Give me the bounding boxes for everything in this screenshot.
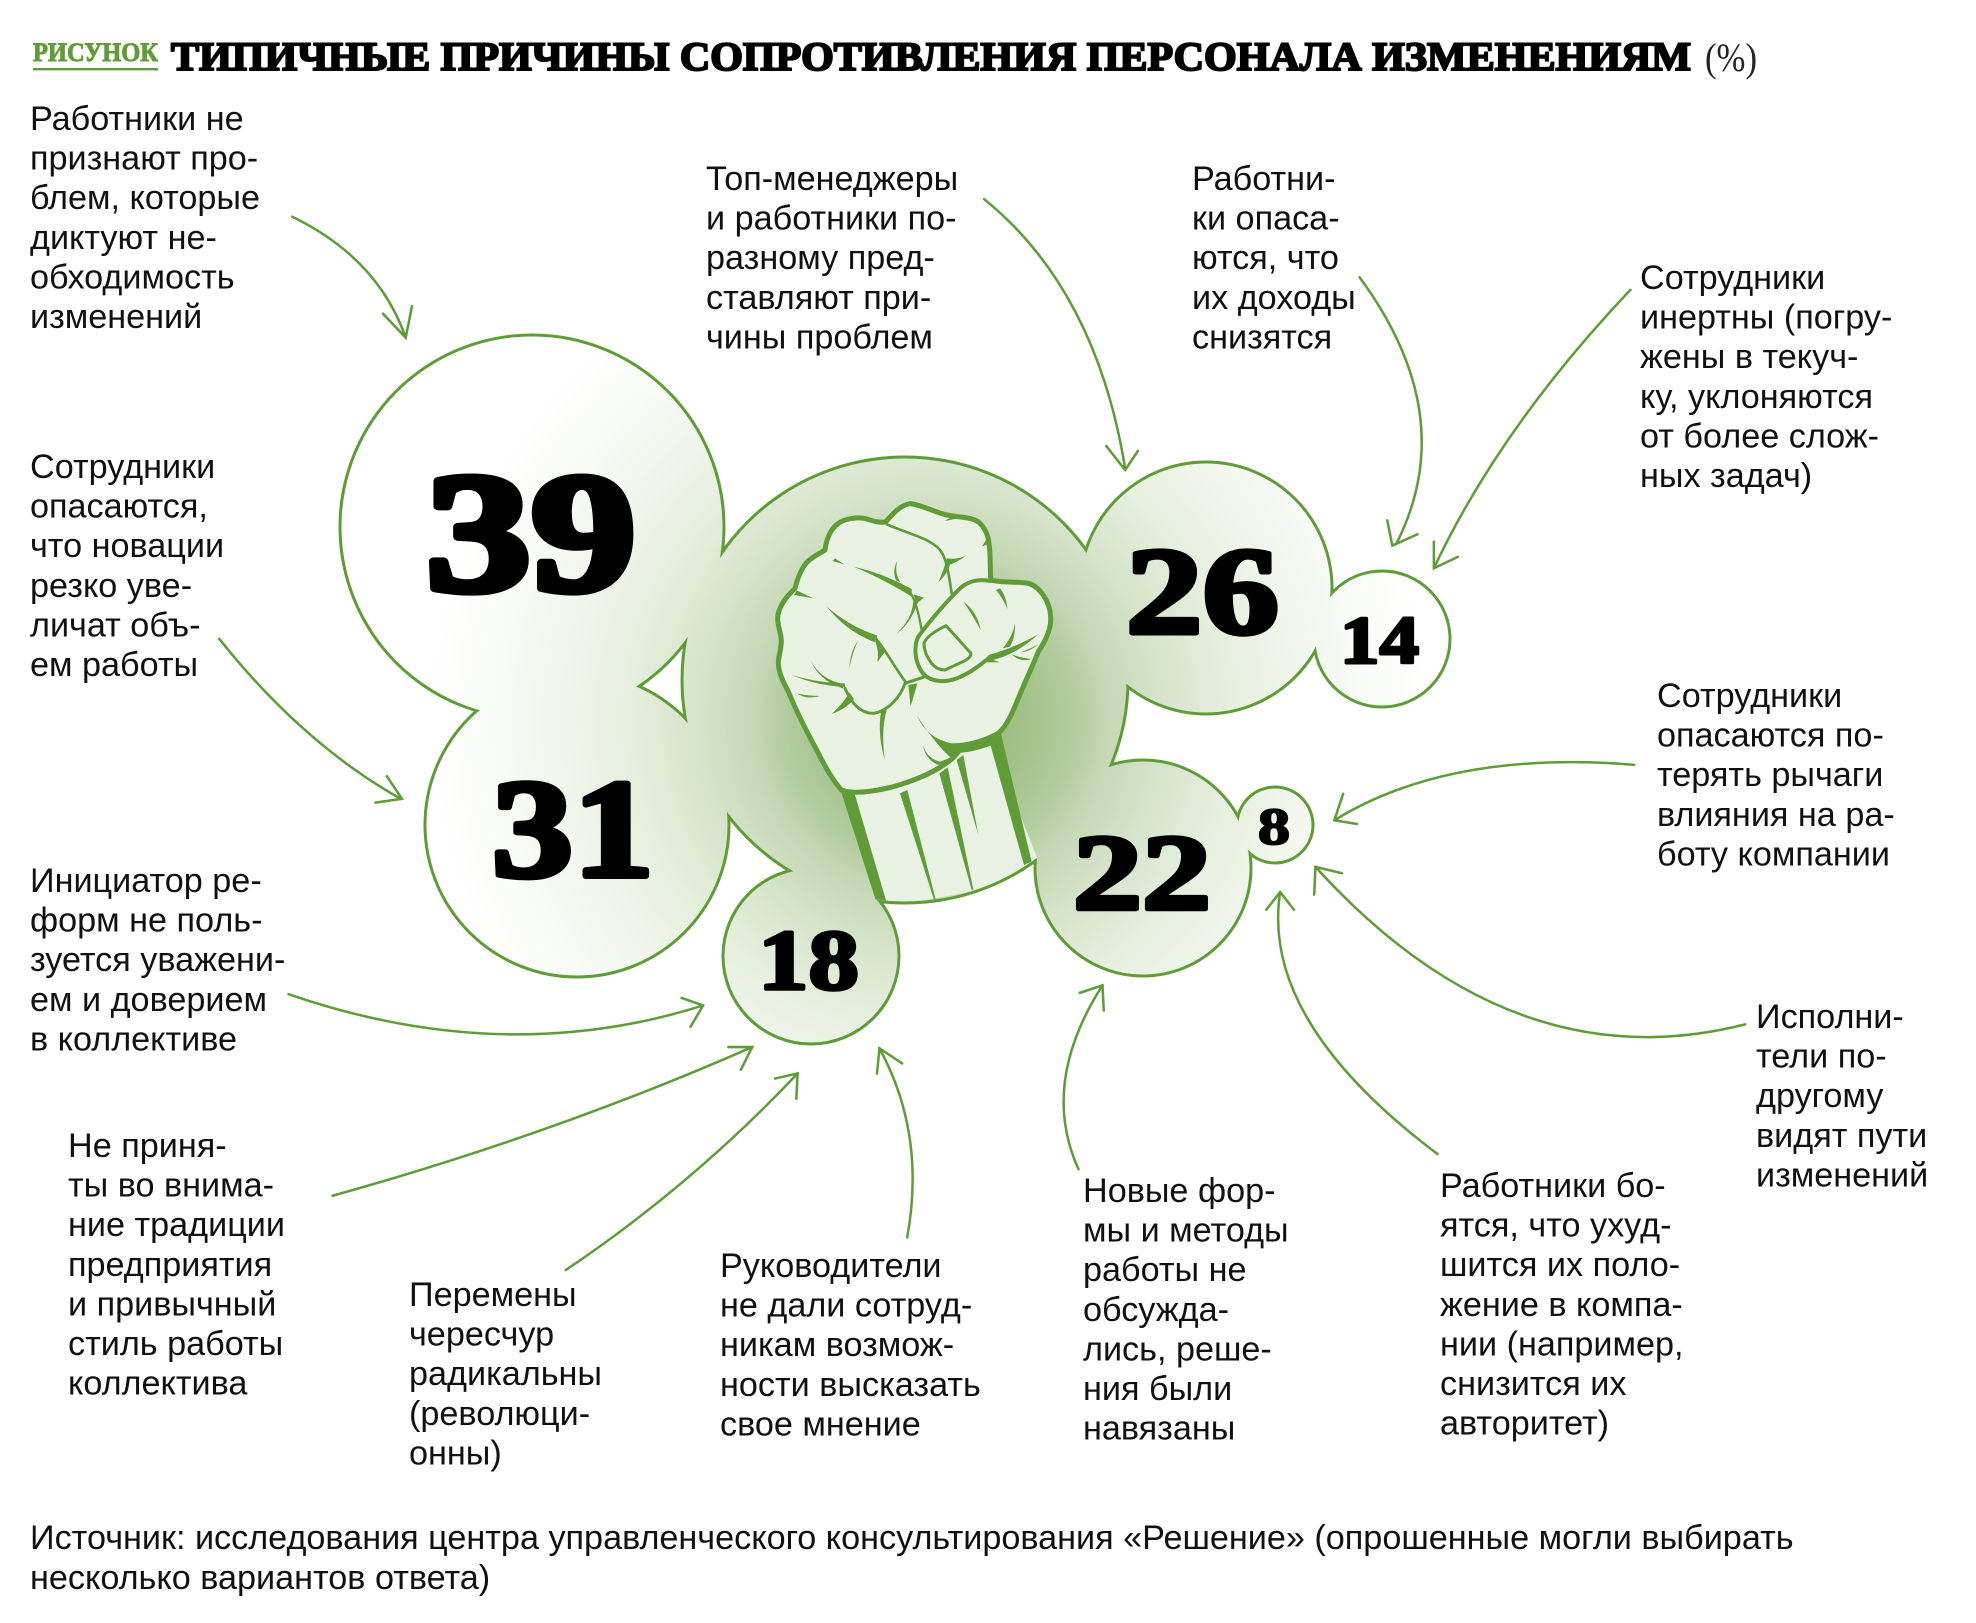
text: no chance to speak: Руководители bbox=[720, 1247, 942, 1285]
arrow 5 bbox=[566, 1074, 798, 1270]
text: new methods imposed: Новые фор- bbox=[1083, 1172, 1276, 1210]
text: position worsens: ятся, что ухуд- bbox=[1440, 1207, 1671, 1245]
text: problems not recognised: обходимость bbox=[30, 258, 235, 296]
palm heel bbox=[917, 715, 1001, 765]
text: inertia: жены в текуч- bbox=[1640, 338, 1858, 376]
text: managers and staff differ: и работники по- bbox=[706, 200, 957, 238]
text: position worsens: Работники бо- bbox=[1440, 1167, 1666, 1205]
text: initiator not respected: в коллективе bbox=[30, 1020, 237, 1058]
arrow 10 bbox=[1334, 762, 1634, 824]
text: problems not recognised: признают про- bbox=[30, 140, 258, 178]
arrow 6 bbox=[877, 1048, 913, 1237]
bubble cluster bbox=[340, 335, 1450, 1044]
text: no chance to speak: свое мнение bbox=[720, 1405, 921, 1443]
text: different paths: другому bbox=[1756, 1077, 1884, 1115]
text: traditions ignored: Не приня- bbox=[68, 1127, 227, 1165]
text: more work: Сотрудники bbox=[30, 448, 215, 486]
arrow 7 bbox=[1064, 985, 1104, 1169]
text: problems not recognised: блем, которые bbox=[30, 179, 260, 217]
arrow 1 bbox=[292, 217, 412, 338]
arrow 9 bbox=[1314, 867, 1745, 1037]
text: inertia: ных задач) bbox=[1640, 457, 1812, 495]
text: position worsens: жение в компа- bbox=[1440, 1286, 1683, 1324]
text: inertia: Сотрудники bbox=[1640, 259, 1825, 297]
text: losing leverage: опасаются по- bbox=[1657, 717, 1884, 755]
text: more work: что новации bbox=[30, 527, 224, 565]
text: traditions ignored: ние традиции bbox=[68, 1206, 285, 1244]
text: more work: опасаются, bbox=[30, 488, 208, 526]
text: more work: ем работы bbox=[30, 646, 198, 684]
thumb bbox=[915, 580, 1038, 681]
text: problems not recognised: Работники не bbox=[30, 100, 244, 138]
text: initiator not respected: зуется уважени- bbox=[30, 941, 285, 979]
number 18: 18 bbox=[758, 912, 859, 1008]
text: new methods imposed: работы не bbox=[1083, 1251, 1246, 1289]
text: income falls: ки опаса- bbox=[1192, 200, 1340, 238]
number 14: 14 bbox=[1340, 602, 1419, 678]
title: (%) bbox=[1705, 35, 1757, 80]
text: more work: личат объ- bbox=[30, 606, 200, 644]
text: position worsens: авторитет) bbox=[1440, 1405, 1609, 1443]
source note: несколько вариантов ответа) bbox=[30, 1559, 490, 1597]
hand creases bbox=[792, 516, 990, 761]
text: income falls: Работни- bbox=[1192, 160, 1336, 198]
text: problems not recognised: изменений bbox=[30, 298, 202, 336]
text: new methods imposed: мы и методы bbox=[1083, 1212, 1289, 1250]
text: income falls: их доходы bbox=[1192, 279, 1356, 317]
arrows bbox=[219, 199, 1745, 1270]
text: initiator not respected: форм не поль- bbox=[30, 902, 262, 940]
text: position worsens: нии (например, bbox=[1440, 1325, 1684, 1363]
arrow 4 bbox=[333, 1047, 752, 1196]
text: different paths: изменений bbox=[1756, 1156, 1928, 1194]
arrow 12 bbox=[1360, 277, 1422, 546]
text: inertia: ку, уклоняются bbox=[1640, 378, 1873, 416]
text: too radical: онны) bbox=[409, 1434, 502, 1472]
text: new methods imposed: лись, реше- bbox=[1083, 1330, 1272, 1368]
text: initiator not respected: Инициатор ре- bbox=[30, 862, 262, 900]
text: no chance to speak: никам возмож- bbox=[720, 1326, 954, 1364]
number 22: 22 bbox=[1073, 814, 1211, 933]
text: traditions ignored: стиль работы bbox=[68, 1325, 283, 1363]
text: traditions ignored: предприятия bbox=[68, 1246, 272, 1284]
text: traditions ignored: коллектива bbox=[68, 1365, 248, 1403]
text: more work: резко уве- bbox=[30, 567, 192, 605]
number 31: 31 bbox=[492, 752, 654, 907]
text: inertia: от более слож- bbox=[1640, 417, 1879, 455]
text: no chance to speak: не дали сотруд- bbox=[720, 1287, 972, 1325]
text: different paths: видят пути bbox=[1756, 1117, 1927, 1155]
number 26: 26 bbox=[1126, 523, 1279, 660]
arrow 3 bbox=[289, 994, 703, 1034]
text: initiator not respected: ем и доверием bbox=[30, 981, 267, 1019]
text: inertia: инертны (погру- bbox=[1640, 299, 1892, 337]
title: ТИПИЧНЫЕ ПРИЧИНЫ СОПРОТИВЛЕНИЯ ПЕРСОНАЛА ИЗМЕНЕНИЯМ bbox=[171, 34, 1691, 79]
text: too radical: (революци- bbox=[409, 1395, 590, 1433]
text: managers and staff differ: ставляют при- bbox=[706, 279, 931, 317]
arrow 2 bbox=[219, 639, 402, 803]
text: losing leverage: Сотрудники bbox=[1657, 677, 1842, 715]
text: position worsens: шится их поло- bbox=[1440, 1246, 1680, 1284]
text: income falls: снизятся bbox=[1192, 318, 1332, 356]
forearm bbox=[841, 734, 1037, 902]
text: new methods imposed: ния были bbox=[1083, 1370, 1232, 1408]
text: no chance to speak: ности высказать bbox=[720, 1366, 981, 1404]
text: new methods imposed: обсужда- bbox=[1083, 1291, 1229, 1329]
source note: Источник: исследования центра управленческого консультирования «Решение» (опрошенные могли выбирать bbox=[30, 1519, 1794, 1557]
number 8: 8 bbox=[1258, 799, 1290, 856]
text: problems not recognised: диктуют не- bbox=[30, 219, 217, 257]
text: too radical: чересчур bbox=[409, 1316, 554, 1354]
number 39: 39 bbox=[426, 439, 636, 627]
text: managers and staff differ: Топ-менеджеры bbox=[706, 160, 958, 198]
icon: raised fist bbox=[778, 504, 1051, 908]
text: managers and staff differ: чины проблем bbox=[706, 318, 933, 356]
text: different paths: тели по- bbox=[1756, 1038, 1887, 1076]
text: traditions ignored: и привычный bbox=[68, 1285, 276, 1323]
arrow 11 bbox=[1434, 290, 1630, 568]
arrow 13 bbox=[984, 199, 1138, 470]
text: managers and staff differ: разному пред- bbox=[706, 239, 935, 277]
text: losing leverage: терять рычаги bbox=[1657, 756, 1883, 794]
text: income falls: ются, что bbox=[1192, 239, 1339, 277]
text: losing leverage: влияния на ра- bbox=[1657, 796, 1895, 834]
text: different paths: Исполни- bbox=[1756, 998, 1904, 1036]
text: losing leverage: боту компании bbox=[1657, 835, 1890, 873]
text: traditions ignored: ты во внима- bbox=[68, 1167, 274, 1205]
text: new methods imposed: навязаны bbox=[1083, 1410, 1235, 1448]
text: too radical: радикальны bbox=[409, 1355, 602, 1393]
figure label: РИСУНОК bbox=[33, 38, 158, 67]
text: too radical: Перемены bbox=[409, 1276, 577, 1314]
arrow 8 bbox=[1266, 892, 1438, 1154]
hand outline bbox=[778, 504, 1051, 792]
text: position worsens: снизится их bbox=[1440, 1365, 1626, 1403]
